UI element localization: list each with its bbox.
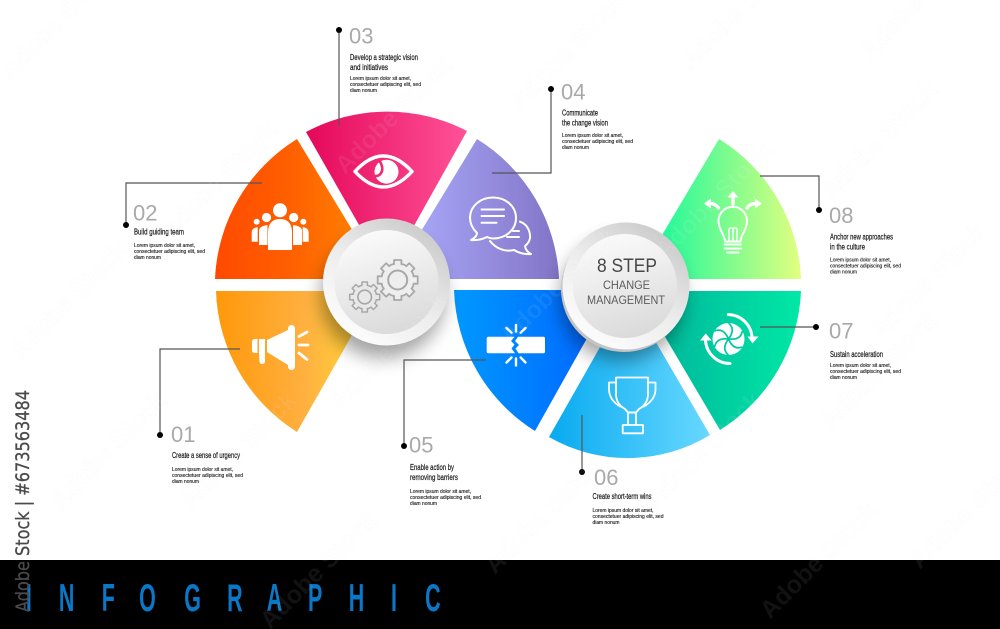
callout 03: Develop a strategic vision [350, 52, 418, 62]
callout 05: consectetuer adipiscing elit, sed [410, 495, 481, 501]
panel: step 04 communicate the change vision [392, 139, 559, 279]
icon: small gear [350, 282, 380, 312]
callout 01: Lorem ipsum dolor sit amet, [172, 467, 233, 473]
callout 03: 03 [349, 24, 373, 48]
panel: step 06 create short-term wins [549, 296, 710, 458]
callout 05: diam nonum [410, 501, 438, 507]
segment 01 [216, 291, 377, 432]
callout 07: diam nonum [830, 375, 858, 381]
faint diagonal watermarks: Adobe Stock [154, 116, 282, 244]
callout 07: Sustain acceleration [830, 349, 883, 359]
faint diagonal watermarks: Adobe Stock [329, 51, 457, 179]
callout 04 [492, 80, 633, 173]
panel: step 03 develop a strategic vision [306, 112, 467, 274]
faint diagonal watermarks: Adobe Stock [649, 136, 777, 264]
callout 07: 07 [829, 318, 853, 344]
callout 02: Build guiding team [134, 226, 184, 236]
panel: step 02 build guiding team [215, 139, 382, 279]
callout 08: diam nonum [830, 270, 858, 276]
panel: step 07 sustain acceleration [638, 291, 801, 430]
callout 07: consectetuer adipiscing elit, sed [830, 369, 901, 375]
segment 08 [636, 139, 801, 279]
callout 06: diam nonum [592, 520, 620, 526]
callout 06: Create short-term wins [592, 491, 652, 501]
callout 02: Lorem ipsum dolor sit amet, [134, 243, 195, 249]
callout 04: Lorem ipsum dolor sit amet, [562, 133, 623, 139]
callout 01: Create a sense of urgency [172, 450, 240, 460]
callout 03: and initiatives [350, 62, 388, 72]
panel: step 08 anchor new approaches [636, 139, 801, 279]
callout 07: Lorem ipsum dolor sit amet, [830, 363, 891, 369]
callout 06: Lorem ipsum dolor sit amet, [592, 508, 654, 514]
faint diagonal watermarks: Adobe Stock [44, 386, 172, 514]
callout 04: 04 [561, 80, 585, 104]
callout 07 [760, 318, 901, 381]
callout 08: 08 [829, 203, 853, 228]
icon: trophy [609, 378, 656, 433]
icon: megaphone [252, 325, 308, 370]
callout 01: 01 [171, 422, 195, 447]
icon: speech bubbles [470, 198, 531, 254]
callout 02: consectetuer adipiscing elit, sed [134, 249, 205, 255]
faint diagonal watermarks: Adobe Stock [814, 76, 942, 204]
callout 03: consectetuer adipiscing elit, sed [350, 82, 421, 88]
icon: light bulb with arrows [704, 191, 762, 252]
faint diagonal watermarks: Adobe Stock [174, 386, 302, 514]
icon: large gear [378, 260, 418, 300]
panel: step 01 create a sense of urgency [216, 291, 377, 432]
icon: eye [355, 156, 412, 187]
faint diagonal watermarks: Adobe Stock [324, 286, 452, 414]
segment 04 [392, 139, 559, 279]
callout 05: Enable action by [410, 462, 454, 472]
callout 06: 06 [594, 465, 618, 490]
callout 05: Lorem ipsum dolor sit amet, [410, 489, 471, 495]
callout 04: the change vision [562, 118, 608, 128]
callout 05 [401, 360, 486, 507]
heading: change: CHANGE [603, 278, 650, 292]
callout 04: consectetuer adipiscing elit, sed [562, 139, 633, 145]
callout 06 [579, 415, 664, 526]
faint diagonal watermarks: Adobe Stock [754, 496, 882, 624]
callout 05: 05 [409, 432, 433, 458]
callout 05: removing barriers [410, 472, 458, 482]
segment 02 [215, 139, 382, 279]
footer title: infographic: INFOGRAPHIC [26, 576, 441, 620]
faint diagonal watermarks: Adobe Stock [494, 221, 622, 349]
callout 08: consectetuer adipiscing elit, sed [830, 264, 901, 270]
callout 08: in the culture [830, 242, 865, 252]
callout 02: diam nonum [134, 255, 162, 261]
callout 06: consectetuer adipiscing elit, sed [592, 514, 664, 520]
center disc: 8 step change management [561, 222, 690, 352]
callout 04: diam nonum [562, 145, 590, 151]
faint diagonal watermarks: Adobe Stock [4, 236, 132, 364]
panel: step 05 enable action by removing barriers [454, 290, 614, 431]
icon: turbine with rotating arrows [700, 314, 758, 364]
faint diagonal watermarks: Adobe Stock [864, 216, 992, 344]
disc shadow: gears [321, 234, 445, 358]
heading: management: MANAGEMENT [587, 293, 666, 307]
callout 01: consectetuer adipiscing elit, sed [172, 473, 243, 479]
faint diagonal watermarks: Adobe Stock [814, 306, 942, 434]
callout 08: Anchor new approaches [830, 232, 893, 242]
center disc: gears [323, 218, 450, 346]
segment 06 [549, 296, 710, 458]
segment 07 [638, 291, 801, 430]
callout 03: Lorem ipsum dolor sit amet, [350, 76, 411, 82]
callout 08: Lorem ipsum dolor sit amet, [830, 258, 891, 264]
callout 02: 02 [133, 200, 157, 226]
segment 03 [306, 112, 467, 274]
faint diagonal watermarks: Adobe Stock [479, 451, 607, 579]
icon: team of people [252, 203, 309, 250]
heading: 8 step: 8 STEP [597, 255, 657, 277]
callout 08 [760, 176, 901, 276]
callout 04: Communicate [562, 108, 598, 118]
callout 01: diam nonum [172, 479, 200, 485]
faint diagonal watermarks: Adobe Stock [639, 386, 767, 514]
disc shadow: title [560, 237, 684, 361]
callout 02 [123, 183, 262, 261]
callout 03 [336, 24, 421, 126]
callout 01 [157, 349, 243, 485]
segment 05 [454, 290, 614, 431]
icon: broken bar [487, 325, 545, 366]
callout 03: diam nonum [350, 88, 378, 94]
vertical stock id label: Adobe Stock | #673563484 [12, 390, 34, 612]
footer band [0, 560, 1000, 629]
